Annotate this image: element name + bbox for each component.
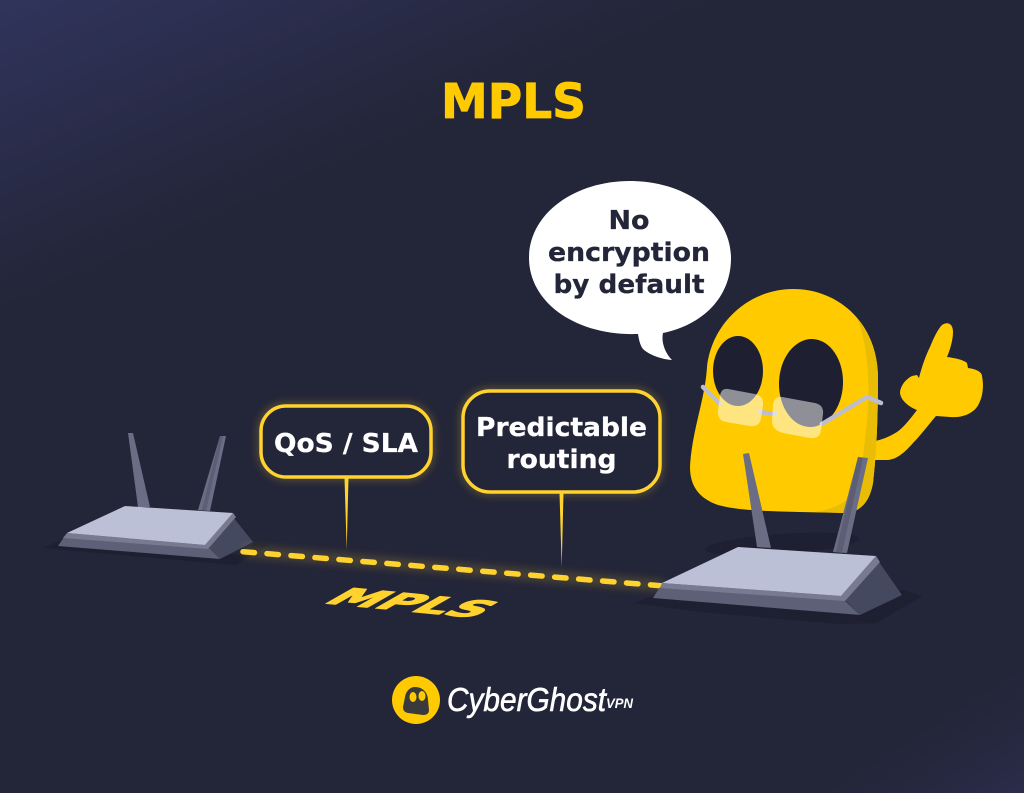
callout: Predictable routing: Predictable xyxy=(476,413,647,443)
router antennas xyxy=(743,453,771,548)
dashed MPLS link xyxy=(243,551,664,586)
callout: Predictable routing xyxy=(463,391,660,567)
right router xyxy=(634,453,922,624)
speech bubble xyxy=(529,181,731,360)
ghost side shading xyxy=(813,318,878,513)
right eye xyxy=(777,338,845,428)
ghost arm and thumbs-up hand xyxy=(875,323,983,460)
left eye xyxy=(713,336,763,406)
speech bubble: encryption xyxy=(548,238,710,268)
callout: Predictable routing: routing xyxy=(506,445,616,475)
CyberGhost VPN logo: VPN xyxy=(606,695,634,711)
router bevel xyxy=(660,556,880,601)
callout: QoS / SLA xyxy=(261,406,431,550)
ghost body xyxy=(690,289,878,513)
ghost character xyxy=(690,289,983,513)
speech bubble: No xyxy=(608,206,650,236)
router shadows xyxy=(704,529,860,559)
glasses xyxy=(703,387,881,438)
CyberGhost VPN logo xyxy=(392,676,634,724)
router right side xyxy=(845,562,902,615)
left router xyxy=(42,433,268,565)
router front band xyxy=(653,587,860,615)
callout: QoS / SLA: QoS / SLA xyxy=(274,429,418,459)
logo icon xyxy=(392,676,440,724)
title: MPLS xyxy=(441,74,586,130)
logo wordmark: CyberGhost xyxy=(447,681,608,718)
road label: MPLS xyxy=(313,583,511,623)
router top xyxy=(662,547,876,596)
speech bubble: by default xyxy=(554,270,704,300)
